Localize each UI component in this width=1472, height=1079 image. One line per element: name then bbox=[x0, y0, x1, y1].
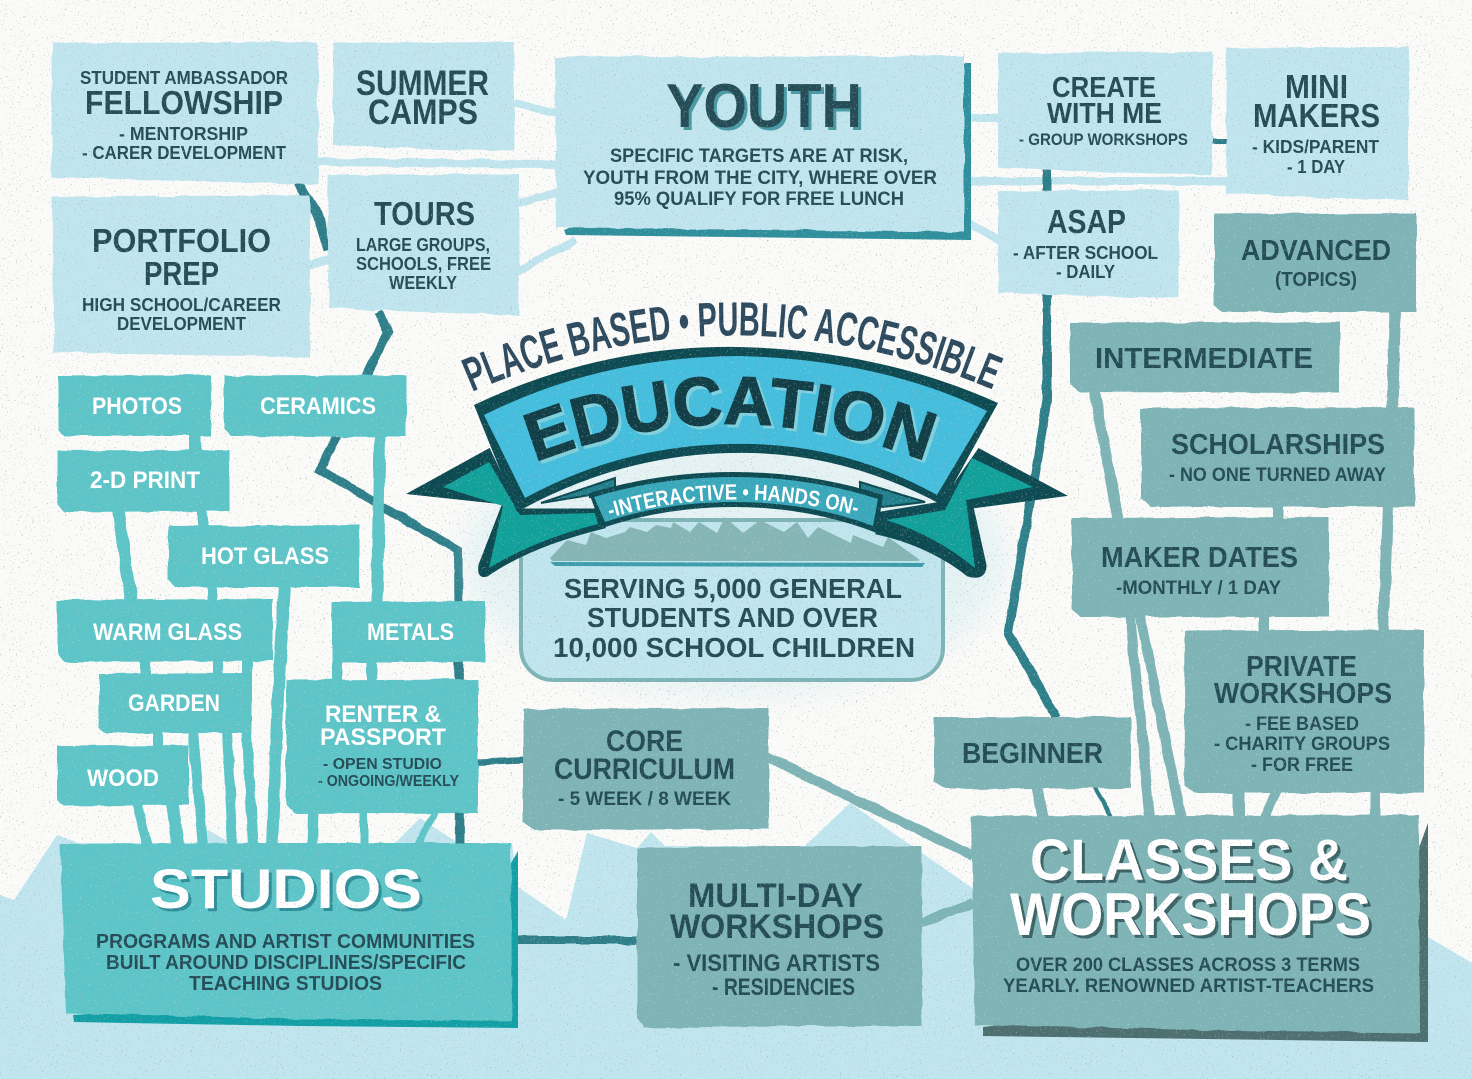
callout: serving numbers panel bbox=[521, 520, 943, 680]
panel: asap: - AFTER SCHOOL bbox=[1013, 243, 1158, 263]
panel: tours bbox=[327, 174, 519, 315]
tag: photos: PHOTOS bbox=[92, 393, 182, 420]
panel: classes and workshops: YEARLY. RENOWNED ARTIST-TEACHERS bbox=[1003, 976, 1374, 997]
panel: scholarships: - NO ONE TURNED AWAY bbox=[1169, 465, 1386, 486]
panel: scholarships bbox=[1141, 407, 1414, 507]
tag: wood: WOOD bbox=[87, 765, 159, 792]
panel: core curriculum: CORE bbox=[606, 725, 683, 758]
panel: renter and passport: - OPEN STUDIO bbox=[323, 756, 442, 773]
panel: renter and passport: - ONGOING/WEEKLY bbox=[318, 773, 459, 790]
ribbon text: interactive, hands on: -INTERACTIVE • HANDS ON- bbox=[608, 484, 858, 516]
panel: youth: YOUTH FROM THE CITY, WHERE OVER bbox=[583, 168, 937, 189]
panel: create with me: CREATE bbox=[1052, 72, 1156, 104]
tag: warm glass: WARM GLASS bbox=[93, 619, 242, 646]
panel: intermediate bbox=[1070, 322, 1340, 393]
glow behind badge bbox=[465, 425, 1005, 695]
panel: studios: BUILT AROUND DISCIPLINES/SPECIFIC bbox=[106, 952, 466, 974]
panel: portfolio prep: HIGH SCHOOL/CAREER bbox=[82, 295, 281, 315]
panel: private workshops bbox=[1184, 630, 1424, 793]
panel: beginner: BEGINNER bbox=[962, 738, 1103, 770]
panel: multi-day workshops bbox=[637, 846, 922, 1028]
panel: asap: - DAILY bbox=[1056, 262, 1115, 282]
dark links bbox=[298, 141, 1228, 940]
panel: create with me: - GROUP WORKSHOPS bbox=[1019, 130, 1188, 149]
panel: tours: SCHOOLS, FREE bbox=[356, 254, 491, 274]
panel: multi-day workshops: MULTI-DAY bbox=[688, 877, 863, 915]
panel: core curriculum: - 5 WEEK / 8 WEEK bbox=[558, 789, 731, 810]
panel: student ambassador fellowship: - MENTORSHIP bbox=[119, 124, 248, 144]
icon: serrated mountain range bbox=[550, 517, 925, 567]
panel: asap: ASAP bbox=[1047, 203, 1126, 240]
panel: summer camps: CAMPS bbox=[368, 93, 478, 132]
panel: student ambassador fellowship: FELLOWSHIP bbox=[85, 84, 283, 121]
panel: mini makers: - 1 DAY bbox=[1287, 157, 1345, 177]
tag: hot glass: HOT GLASS bbox=[201, 543, 329, 570]
panel: multi-day workshops: - RESIDENCIES bbox=[712, 974, 855, 1001]
tag: ceramics: CERAMICS bbox=[260, 393, 376, 420]
panel: asap bbox=[998, 190, 1179, 298]
connector lines bbox=[118, 103, 1395, 940]
panel: advanced: (TOPICS) bbox=[1275, 269, 1357, 291]
tag: hot glass bbox=[168, 525, 359, 587]
class links bbox=[767, 310, 1395, 923]
panel: create with me: WITH ME bbox=[1047, 98, 1162, 130]
panel: mini makers: MAKERS bbox=[1253, 97, 1380, 134]
panel: multi-day workshops: WORKSHOPS bbox=[670, 908, 884, 946]
tag: 2-d print: 2-D PRINT bbox=[90, 467, 200, 494]
panel: advanced bbox=[1214, 213, 1416, 312]
panel: summer camps bbox=[333, 42, 514, 151]
panel: mini makers: MINI bbox=[1285, 68, 1348, 105]
panel: create with me bbox=[998, 52, 1212, 175]
panel: youth: 95% QUALIFY FOR FREE LUNCH bbox=[614, 189, 904, 210]
heading: place based, public accessible: PLACE BASED • PUBLIC ACCESSIBLE bbox=[461, 302, 1004, 392]
panel: portfolio prep bbox=[52, 195, 310, 357]
right ribbon tail bbox=[877, 450, 1063, 576]
panel: private workshops: - FEE BASED bbox=[1245, 714, 1359, 735]
panel: private workshops: - FOR FREE bbox=[1251, 755, 1353, 776]
panel: private workshops: PRIVATE bbox=[1246, 651, 1357, 683]
panel: renter and passport: RENTER & bbox=[325, 701, 441, 728]
studio links bbox=[118, 434, 435, 847]
panel: tours: LARGE GROUPS, bbox=[356, 235, 490, 255]
tag: photos bbox=[58, 375, 211, 436]
panel: core curriculum: CURRICULUM bbox=[554, 753, 735, 786]
panel: private workshops: - CHARITY GROUPS bbox=[1214, 734, 1390, 755]
ribbon folds bbox=[541, 478, 615, 503]
panel: studios: STUDIOS bbox=[150, 857, 422, 920]
panel: classes and workshops bbox=[971, 815, 1428, 1042]
panel: maker dates: -MONTHLY / 1 DAY bbox=[1116, 578, 1281, 599]
tag: garden: GARDEN bbox=[128, 690, 220, 717]
panel: portfolio prep: DEVELOPMENT bbox=[117, 314, 246, 334]
main ribbon bbox=[474, 347, 998, 512]
panel: private workshops: WORKSHOPS bbox=[1214, 678, 1392, 710]
panel: advanced: ADVANCED bbox=[1241, 235, 1391, 267]
panel: student ambassador fellowship: STUDENT AMBASSADOR bbox=[80, 68, 288, 88]
panel: beginner bbox=[934, 717, 1131, 789]
panel: maker dates bbox=[1072, 517, 1329, 617]
panel: classes and workshops: WORKSHOPS bbox=[1010, 881, 1371, 948]
panel: renter and passport: PASSPORT bbox=[320, 724, 446, 751]
panel: student ambassador fellowship: - CARER DEVELOPMENT bbox=[82, 143, 286, 163]
heading: education: EDUCATION bbox=[522, 376, 940, 464]
tag: warm glass bbox=[57, 599, 273, 662]
callout: serving numbers panel: STUDENTS AND OVER bbox=[587, 602, 878, 633]
panel: summer camps: SUMMER bbox=[356, 64, 489, 103]
panel: portfolio prep: PREP bbox=[144, 255, 219, 292]
panel: maker dates: MAKER DATES bbox=[1101, 542, 1298, 574]
panel: multi-day workshops: - VISITING ARTISTS bbox=[673, 950, 880, 977]
panel: renter and passport bbox=[286, 679, 478, 814]
panel: student ambassador fellowship bbox=[52, 42, 318, 184]
tag: metals: METALS bbox=[367, 619, 454, 646]
callout: serving numbers panel: SERVING 5,000 GENERAL bbox=[564, 573, 902, 604]
panel: youth: SPECIFIC TARGETS ARE AT RISK, bbox=[610, 146, 908, 167]
tag: 2-d print bbox=[57, 450, 229, 512]
panel: studios: TEACHING STUDIOS bbox=[189, 973, 382, 995]
panel: mini makers bbox=[1226, 47, 1409, 200]
tag: metals bbox=[332, 601, 485, 662]
sub ribbon bbox=[589, 472, 883, 533]
panel: classes and workshops: CLASSES & bbox=[1030, 828, 1348, 893]
left ribbon tail bbox=[411, 450, 604, 576]
mountains background bbox=[0, 803, 1472, 1079]
tag: wood bbox=[57, 745, 189, 806]
tag: garden bbox=[99, 673, 252, 733]
panel: tours: WEEKLY bbox=[389, 273, 457, 293]
panel: tours: TOURS bbox=[374, 195, 475, 232]
panel: intermediate: INTERMEDIATE bbox=[1095, 343, 1313, 375]
callout: serving numbers panel: 10,000 SCHOOL CHILDREN bbox=[553, 632, 915, 663]
banner: education ribbon bbox=[406, 346, 1068, 578]
panel: youth: YOUTH bbox=[666, 72, 862, 141]
panel: studios bbox=[60, 843, 518, 1028]
panel: mini makers: - KIDS/PARENT bbox=[1252, 137, 1379, 157]
panel: scholarships: SCHOLARSHIPS bbox=[1171, 429, 1385, 461]
panel: core curriculum bbox=[523, 708, 769, 830]
panel: youth bbox=[555, 56, 971, 240]
panel: studios: PROGRAMS AND ARTIST COMMUNITIES bbox=[96, 931, 475, 953]
panel: classes and workshops: OVER 200 CLASSES ACROSS 3 TERMS bbox=[1016, 955, 1360, 976]
tag: ceramics bbox=[224, 375, 406, 437]
youth connectors bbox=[308, 103, 1228, 272]
panel: portfolio prep: PORTFOLIO bbox=[92, 222, 271, 259]
